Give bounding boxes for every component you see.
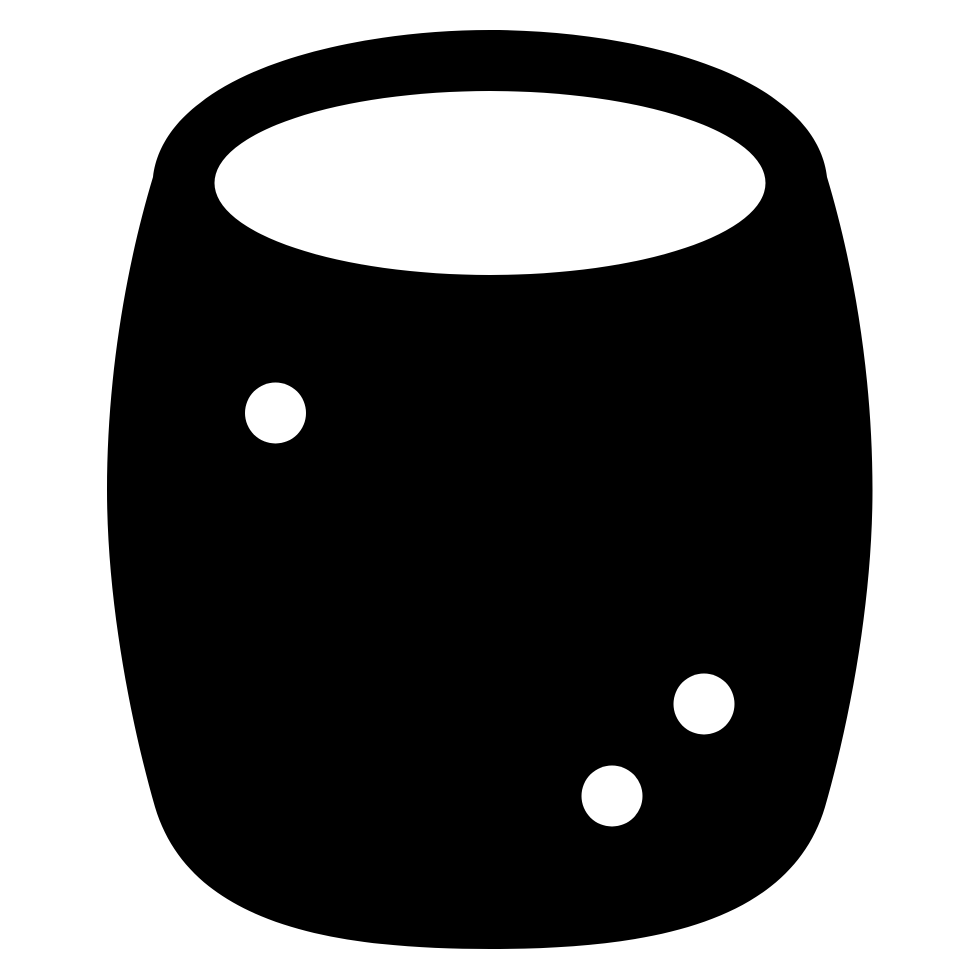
dot: left [245,382,306,444]
dot: lower right lower [582,766,642,826]
dot: lower right upper [674,674,734,734]
cup opening [214,91,766,275]
cup body [107,30,872,949]
